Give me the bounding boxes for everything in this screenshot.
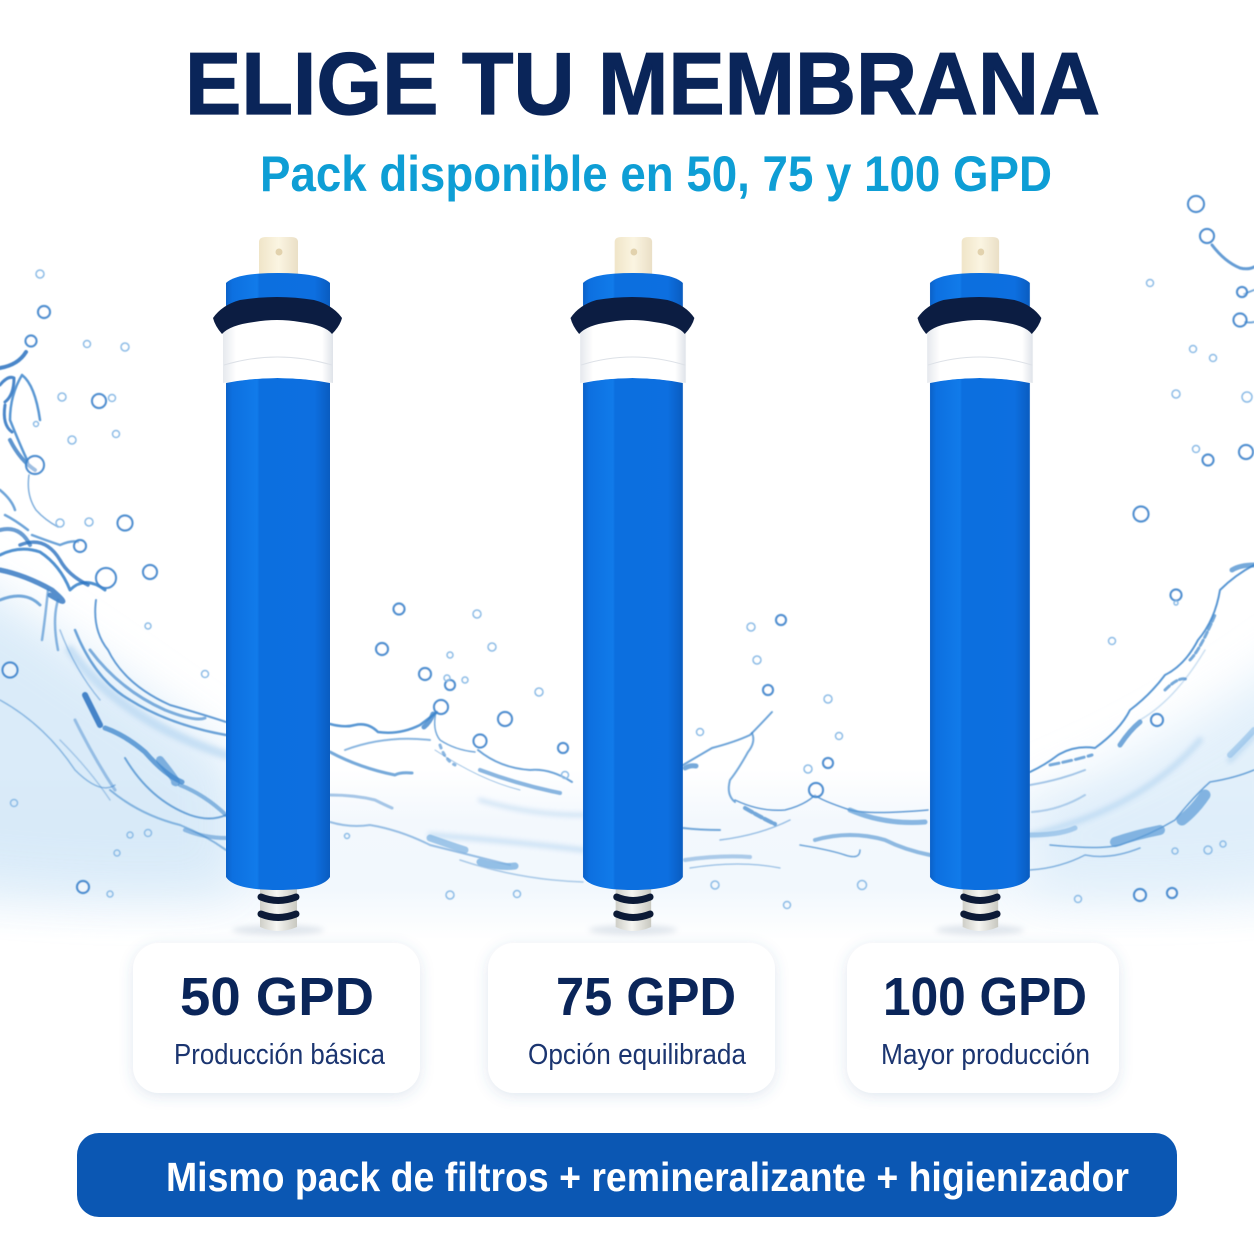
membrane 50 GPD [213, 237, 342, 935]
centre-right wave strokes [683, 712, 930, 868]
centre-left wave strokes [330, 712, 583, 882]
banner: Mismo pack de filtros + remineralizante + higienizador [166, 1154, 1129, 1200]
subtitle: Pack disponible en 50, 75 y 100 GPD [260, 146, 1052, 202]
card: 50 GPD [133, 943, 420, 1093]
title: ELIGE TU MEMBRANA [185, 34, 1100, 133]
right wave strokes [1030, 245, 1254, 870]
card: 100 GPD [847, 943, 1119, 1093]
bubbles: faint [10, 270, 1252, 908]
card: 100 GPD: Mayor producción [881, 1039, 1090, 1071]
left splash strokes [0, 352, 226, 850]
card: 100 GPD: 100 GPD [883, 967, 1087, 1027]
card: 75 GPD [488, 943, 775, 1093]
bubbles: strong [2, 196, 1253, 901]
card: 75 GPD: Opción equilibrada [528, 1039, 747, 1071]
membrane 100 GPD [918, 237, 1041, 935]
card: 50 GPD: Producción básica [174, 1039, 386, 1071]
card: 75 GPD: 75 GPD [556, 967, 736, 1027]
soft highlight bands [70, 650, 1254, 850]
card: 50 GPD: 50 GPD [180, 967, 374, 1027]
membrane 75 GPD [571, 237, 694, 935]
banner [77, 1133, 1177, 1217]
